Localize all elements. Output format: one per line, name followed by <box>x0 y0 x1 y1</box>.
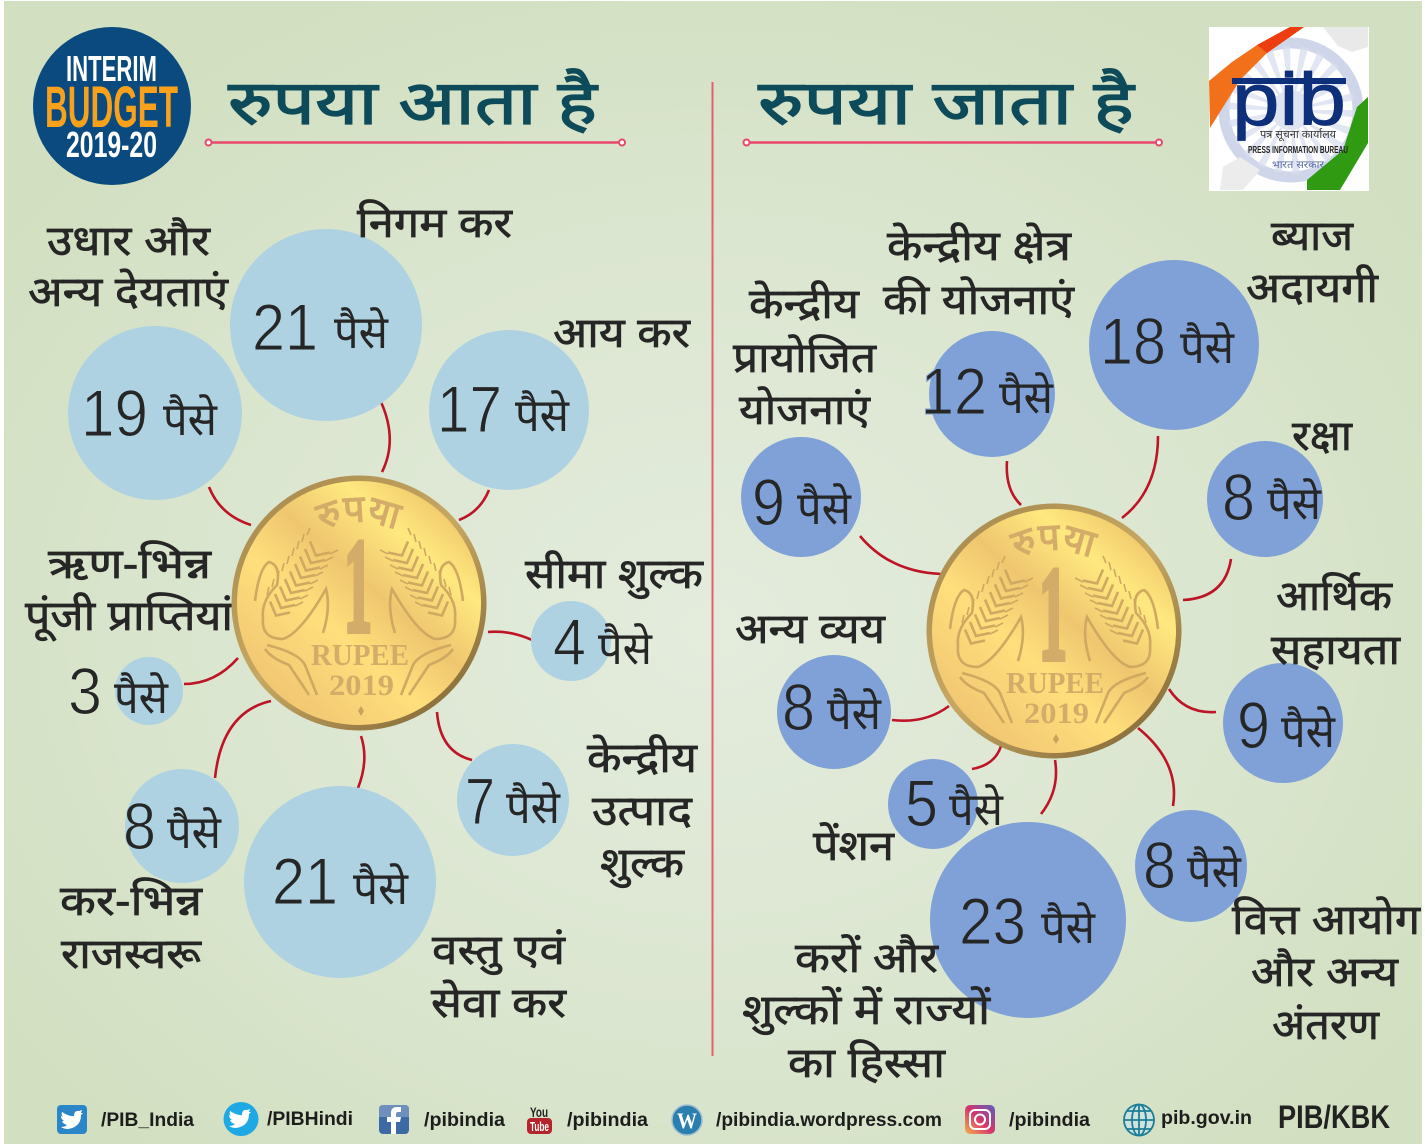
item: non-tax revenue 8: राजस्वरू <box>61 930 202 977</box>
badge: interim budget 2019-20: 2019-20 <box>66 124 157 165</box>
item: subsidies 9: 9 <box>1237 688 1270 762</box>
item: finance commission 8: अंतरण <box>1272 1001 1380 1048</box>
item: centrally sponsored schemes 9: केन्द्रीय <box>749 280 860 327</box>
coin: right: 2019 <box>1024 697 1089 730</box>
item: interest 18: ब्याज <box>1271 212 1354 259</box>
item: borrowings 19: 19 <box>81 376 148 450</box>
text: facebook handle: /pibindia <box>424 1110 505 1131</box>
item: borrowings 19: अन्य देयताएं <box>28 268 229 315</box>
item: defence 8: पैसे <box>1267 476 1322 529</box>
text: wordpress handle: /pibindia.wordpress.com <box>716 1110 942 1131</box>
item: customs 4: सीमा शुल्क <box>525 550 704 599</box>
item: interest 18: 18 <box>1100 304 1166 378</box>
logo: PIB: PRESS INFORMATION BUREAU <box>1248 145 1348 156</box>
heading: money goes to <box>744 67 1162 146</box>
item: corporate tax 21 <box>230 199 513 421</box>
item: other expenditure 8: पैसे <box>827 686 882 739</box>
item: centrally sponsored schemes 9: पैसे <box>797 481 852 534</box>
item: GST 21 <box>244 786 567 1026</box>
icon: twitter circle <box>224 1102 258 1136</box>
coin: right: रुपया <box>1008 525 1099 558</box>
item: corporate tax 21: निगम कर <box>357 199 513 246</box>
item: GST 21: 21 <box>272 844 338 918</box>
item: defence 8: रक्षा <box>1292 412 1353 459</box>
item: states share 23: 23 <box>959 884 1026 958</box>
icon: facebook <box>379 1105 409 1134</box>
item: excise 7: 7 <box>465 764 495 838</box>
item: central sector schemes 12: 12 <box>921 354 987 428</box>
item: borrowings 19: पैसे <box>163 392 218 445</box>
item: pension 5: पेंशन <box>813 822 895 869</box>
connector curves: right <box>860 436 1231 814</box>
item: non-debt capital 3: पैसे <box>114 670 169 723</box>
item: excise 7 <box>457 734 698 888</box>
icon: wordpress <box>672 1105 702 1135</box>
item: states share 23 <box>742 822 1126 1086</box>
item: centrally sponsored schemes 9: योजनाएं <box>739 386 871 433</box>
item: subsidies 9: सहायता <box>1271 626 1401 673</box>
item: non-debt capital 3: पूंजी प्राप्तियां <box>25 592 234 641</box>
coin: right: 1 <box>1039 540 1067 688</box>
text: youtube handle: /pibindia <box>567 1110 648 1131</box>
item: interest 18: अदायगी <box>1246 264 1379 311</box>
item: excise 7: पैसे <box>506 780 561 833</box>
icon: youtube: You <box>530 1104 548 1120</box>
item: non-tax revenue 8: पैसे <box>167 805 222 858</box>
text: PIB Hindi: /PIBHindi <box>267 1109 353 1130</box>
item: central sector schemes 12: केन्द्रीय क्षेत्र <box>887 222 1072 269</box>
icon: instagram <box>965 1105 995 1134</box>
logo: PIB: भारत सरकार <box>1272 160 1325 171</box>
item: non-tax revenue 8: कर-भिन्न <box>60 877 203 924</box>
panel: money comes from <box>24 199 704 1026</box>
item: customs 4: पैसे <box>598 621 653 674</box>
icon: globe <box>1124 1104 1154 1136</box>
item: customs 4 <box>525 550 704 681</box>
connector curves: left <box>184 402 532 788</box>
item: customs 4: 4 <box>553 605 586 679</box>
item: finance commission 8: वित्त आयोग <box>1232 896 1421 943</box>
item: central sector schemes 12 <box>883 222 1075 457</box>
item: defence 8: 8 <box>1222 460 1255 534</box>
item: other expenditure 8 <box>735 605 891 769</box>
item: corporate tax 21: 21 <box>252 290 318 364</box>
text: PIB India: /PIB_India <box>101 1110 194 1131</box>
item: excise 7: केन्द्रीय <box>587 734 698 781</box>
item: centrally sponsored schemes 9: 9 <box>752 465 785 539</box>
item: GST 21: सेवा कर <box>431 979 567 1026</box>
logo: PIB: पत्र सूचना कार्यालय <box>1260 128 1337 142</box>
badge: interim budget 2019-20: BUDGET <box>45 75 178 140</box>
coin: left <box>232 476 486 730</box>
coin: left: 2019 <box>329 669 394 702</box>
footer: social handles <box>57 1099 1390 1136</box>
item: excise 7: उत्पाद <box>592 787 693 834</box>
item: finance commission 8: और अन्य <box>1251 948 1399 995</box>
item: borrowings 19 <box>28 217 242 500</box>
item: pension 5 <box>813 759 1004 869</box>
item: other expenditure 8: 8 <box>782 670 815 744</box>
item: non-tax revenue 8: 8 <box>123 789 156 863</box>
item: GST 21: वस्तु एवं <box>432 926 566 975</box>
item: non-debt capital 3 <box>25 540 234 728</box>
item: non-debt capital 3: 3 <box>68 654 102 728</box>
item: subsidies 9: पैसे <box>1281 704 1336 757</box>
item: defence 8 <box>1207 412 1353 557</box>
item: non-debt capital 3: ऋण-भिन्न <box>48 540 212 587</box>
item: income tax 17 <box>429 309 691 490</box>
text: instagram handle: /pibindia <box>1009 1110 1090 1131</box>
item: interest 18 <box>1089 212 1379 430</box>
coin: left: RUPEE <box>311 637 409 672</box>
item: states share 23: पैसे <box>1041 900 1096 953</box>
coin: right: RUPEE <box>1006 665 1104 700</box>
coin: left: रुपया <box>314 497 404 530</box>
item: states share 23: करों और <box>795 934 939 981</box>
logo: PIB <box>1209 27 1369 191</box>
item: other expenditure 8: अन्य व्यय <box>735 605 886 652</box>
icon: youtube <box>527 1104 552 1134</box>
item: borrowings 19: उधार और <box>47 217 211 264</box>
coin: left: 1 <box>344 512 372 660</box>
text: website: pib.gov.in <box>1161 1108 1252 1129</box>
icon: youtube: Tube <box>530 1119 549 1134</box>
item: income tax 17: 17 <box>437 372 502 446</box>
item: finance commission 8 <box>1135 810 1421 1048</box>
item: centrally sponsored schemes 9: प्रायोजित <box>733 334 877 381</box>
heading: money comes from <box>206 67 625 146</box>
icon: wordpress: W <box>677 1108 697 1133</box>
item: subsidies 9 <box>1223 572 1401 783</box>
vertical divider <box>712 82 714 1056</box>
item: interest 18: पैसे <box>1180 320 1235 373</box>
item: subsidies 9: आर्थिक <box>1276 572 1393 619</box>
item: pension 5: 5 <box>905 766 938 840</box>
panel: money goes to <box>732 212 1422 1086</box>
heading: money goes to: रुपया जाता है <box>758 67 1135 138</box>
item: income tax 17: पैसे <box>515 388 570 441</box>
item: states share 23: शुल्कों में राज्यों <box>742 986 991 1035</box>
item: non-tax revenue 8 <box>60 769 239 977</box>
item: centrally sponsored schemes 9 <box>733 280 877 557</box>
item: finance commission 8: पैसे <box>1187 844 1242 897</box>
badge: interim budget 2019-20: INTERIM <box>66 48 157 89</box>
item: central sector schemes 12: की योजनाएं <box>883 276 1075 323</box>
item: finance commission 8: 8 <box>1143 828 1176 902</box>
logo: PIB: pib <box>1232 58 1346 141</box>
item: GST 21: पैसे <box>353 861 409 914</box>
item: pension 5: पैसे <box>949 782 1004 835</box>
badge: interim budget 2019-20 <box>33 27 191 185</box>
item: corporate tax 21: पैसे <box>334 305 389 358</box>
item: income tax 17: आय कर <box>553 309 691 356</box>
item: excise 7: शुल्क <box>600 839 685 888</box>
icon: twitter square <box>57 1105 87 1134</box>
item: central sector schemes 12: पैसे <box>999 370 1054 423</box>
text: credit PIB/KBK: PIB/KBK <box>1278 1099 1390 1135</box>
item: states share 23: का हिस्सा <box>788 1039 946 1086</box>
coin: right <box>926 504 1182 758</box>
heading: money comes from: रुपया आता है <box>228 67 598 138</box>
